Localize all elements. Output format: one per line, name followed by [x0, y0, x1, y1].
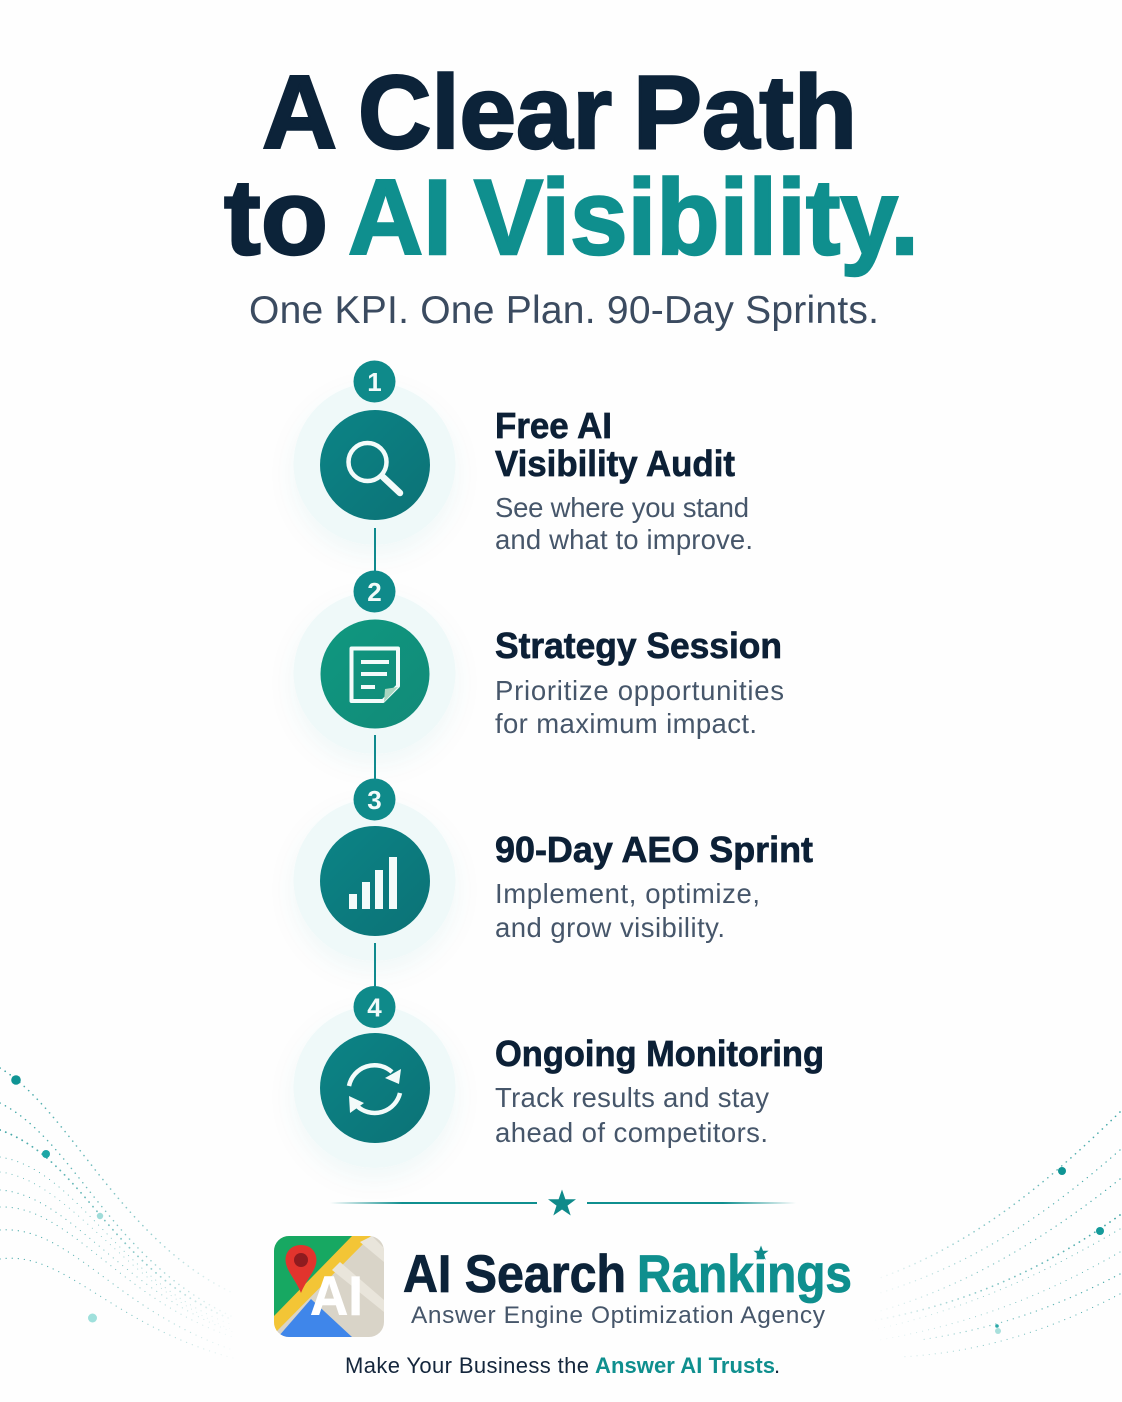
badge 4: 4 [367, 992, 382, 1022]
step 2 [294, 570, 784, 754]
step 3 text: and grow visibility. [495, 912, 725, 943]
title: Clear [358, 55, 612, 171]
badge 2 [354, 570, 396, 612]
step 3 text [495, 829, 813, 943]
brand name [403, 1245, 852, 1304]
logo icon: map with pin and AI [274, 1236, 384, 1337]
title: to [224, 157, 328, 277]
brand name: Rankings [637, 1245, 852, 1304]
step 1 [294, 360, 753, 555]
tagline: . [774, 1353, 780, 1378]
step 1 text: Free AI [495, 405, 612, 446]
step 3 [294, 778, 813, 961]
step 1 text: Visibility Audit [495, 443, 735, 484]
map pin [286, 1245, 316, 1293]
tagline: Make Your Business the [345, 1353, 589, 1378]
title: Path [633, 55, 857, 171]
step 4 text: Track results and stay [495, 1082, 769, 1113]
step 4 text [495, 1033, 824, 1148]
badge 3: 3 [367, 785, 382, 815]
subtitle: One KPI. One Plan. 90-Day Sprints. [249, 289, 879, 332]
title: AI [348, 157, 452, 277]
step 2 text: Strategy Session [495, 625, 782, 666]
step 1 text [495, 405, 753, 555]
step 3 text: 90-Day AEO Sprint [495, 829, 813, 870]
badge 3 [354, 778, 396, 820]
step 4 [294, 986, 824, 1168]
background dotted waves: right [860, 1112, 1120, 1357]
step 4 text: ahead of competitors. [495, 1117, 768, 1148]
title [224, 55, 919, 277]
badge 4 [354, 986, 396, 1028]
step 1 text: See where you stand [495, 492, 749, 523]
icon: magnifying glass [348, 443, 400, 493]
step 4 icon disc [294, 1006, 456, 1168]
step 2 text: Prioritize opportunities [495, 675, 784, 706]
logo letters: AI [310, 1264, 363, 1327]
step 3 text: Implement, optimize, [495, 878, 760, 909]
icon: refresh arrows [349, 1065, 401, 1113]
star over i [753, 1246, 769, 1260]
step 2 text: for maximum impact. [495, 708, 757, 739]
badge 2: 2 [367, 577, 382, 607]
icon: document [352, 648, 398, 702]
tagline [345, 1353, 780, 1378]
badge 1 [354, 360, 396, 402]
agency descriptor: Answer Engine Optimization Agency [411, 1302, 826, 1329]
title: A [262, 55, 337, 171]
step 2 text [495, 625, 784, 739]
tagline: Answer AI Trusts [595, 1353, 775, 1378]
step 1 icon disc [294, 383, 456, 545]
brand name: AI Search [403, 1245, 626, 1304]
divider with star [330, 1190, 796, 1216]
step 4 text: Ongoing Monitoring [495, 1033, 824, 1074]
badge 1: 1 [367, 367, 382, 397]
icon: bar chart [349, 857, 397, 909]
background dotted waves: left [0, 1068, 233, 1358]
step 1 text: and what to improve. [495, 524, 753, 555]
step 3 icon disc [294, 799, 456, 961]
step 2 icon disc [294, 592, 456, 754]
title: Visibility. [474, 157, 919, 277]
connector lines [374, 528, 376, 987]
